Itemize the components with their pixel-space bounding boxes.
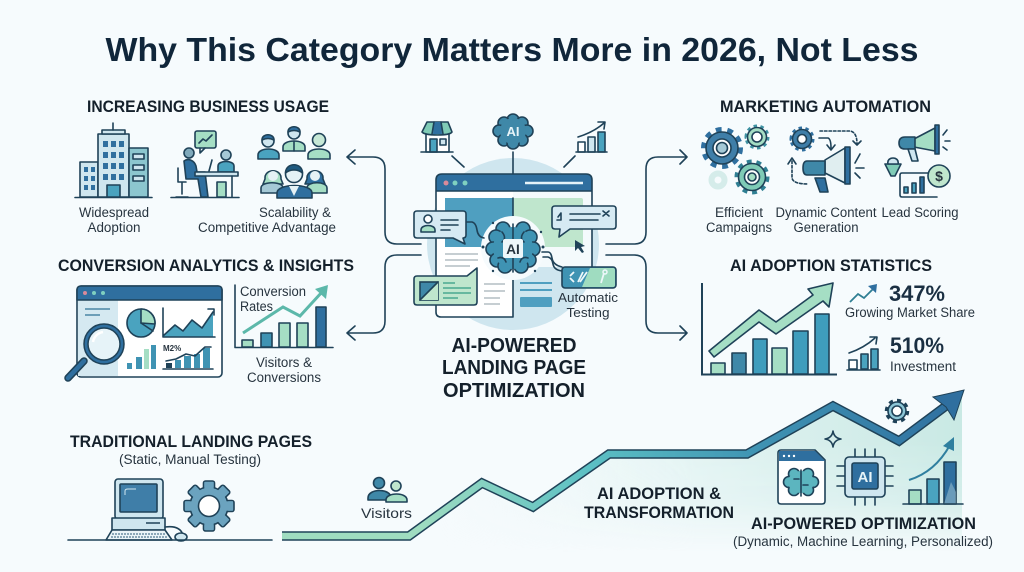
icon: gear (184, 481, 234, 531)
icon: gears (704, 126, 768, 192)
heading: INCREASING BUSINESS USAGE (87, 97, 329, 116)
icon: AI chip (837, 449, 893, 505)
icon: old computer (106, 479, 187, 541)
heading: TRADITIONAL LANDING PAGES (70, 432, 312, 451)
label: widespread: Widespread (79, 205, 149, 220)
subheading: (Static, Manual Testing) (119, 452, 261, 467)
label: generation: Generation (794, 220, 858, 235)
testing bar (543, 257, 616, 288)
center heading (442, 335, 586, 402)
label: campaigns: Campaigns (706, 220, 772, 235)
heading: AI-POWERED OPTIMIZATION (751, 514, 976, 533)
heading: AI ADOPTION STATISTICS (730, 256, 932, 275)
label: growing market share: Growing Market Share (845, 305, 975, 320)
bubble: image card (414, 268, 477, 305)
icon: small gear (886, 400, 908, 422)
label: automatic: Automatic (558, 290, 619, 305)
label: investment: Investment (890, 359, 956, 374)
icon: growth chart (576, 122, 607, 152)
area under the line (585, 398, 962, 540)
chart: conversion rates: Rates (240, 299, 273, 314)
label: adoption: Adoption (88, 220, 140, 235)
label: scalability: Scalability & (259, 205, 331, 220)
panel: marketing automation (704, 97, 958, 235)
AI brain center (467, 216, 562, 280)
bar chart with arrow (702, 283, 837, 374)
center heading: OPTIMIZATION (443, 380, 585, 402)
icon: trend up (850, 284, 877, 302)
heading: CONVERSION ANALYTICS & INSIGHTS (58, 256, 354, 275)
dashboard illustration: M2% (163, 344, 181, 353)
icon: lead scoring (885, 125, 950, 197)
dashboard illustration (68, 286, 222, 378)
stat: 347%: 347% (889, 281, 945, 306)
icon: AI brain top (493, 114, 533, 149)
bubble: message (552, 206, 616, 237)
panel: AI adoption statistics (702, 256, 975, 374)
center heading: LANDING PAGE (442, 357, 586, 379)
icon: browser with brain (778, 450, 825, 504)
label: testing: Testing (566, 305, 610, 320)
subheading: (Dynamic, Machine Learning, Personalized) (733, 534, 993, 549)
icon: small bars (847, 337, 880, 370)
icon: rising bars (903, 437, 963, 504)
icon: AI brain top: AI (506, 124, 520, 139)
label: visitors: Visitors (361, 505, 412, 521)
heading: MARKETING AUTOMATION (720, 97, 931, 116)
background circle (427, 158, 599, 330)
icon: office buildings (75, 123, 152, 198)
connector lines (452, 152, 575, 174)
label: AI adoption and transformation (584, 484, 734, 522)
AI brain center: AI (506, 242, 520, 257)
bubble: profile (414, 211, 466, 244)
title: Why This Category Matters More in 2026, Not Less (106, 31, 918, 68)
label: AI adoption and transformation: AI ADOPTION & (597, 484, 721, 503)
chart: conversion rates (235, 284, 333, 348)
panel: AI-powered optimization (733, 400, 993, 549)
icon: sparkle (825, 431, 841, 447)
icon: dynamic megaphone (788, 128, 864, 192)
panel: conversion analytics (58, 256, 354, 385)
label: conversions: Conversions (247, 370, 321, 385)
ground line (68, 539, 272, 541)
label: dynamic content: Dynamic Content (776, 205, 877, 220)
stat: 510%: 510% (890, 333, 944, 358)
icon: lead scoring: $ (935, 168, 943, 184)
panel: traditional landing pages (68, 432, 312, 541)
arrows from center to left panels (347, 150, 421, 340)
center heading: AI-POWERED (452, 335, 576, 357)
icon: visitors (368, 478, 407, 502)
arrows from center to right panels (606, 150, 687, 340)
bottom timeline: growth path (282, 390, 964, 552)
label: competitive advantage: Competitive Advantage (198, 220, 336, 235)
label: efficient: Efficient (715, 205, 763, 220)
icon: AI chip: AI (858, 469, 872, 486)
center illustration: AI-powered landing page (414, 114, 619, 330)
panel: increasing business usage (75, 97, 336, 235)
icon: team of people (258, 127, 330, 198)
label: AI adoption and transformation: TRANSFORMATION (584, 503, 734, 522)
label: lead scoring: Lead Scoring (882, 205, 958, 220)
browser window (436, 174, 592, 317)
label: visitors: Visitors & (256, 355, 312, 370)
rising arrow (282, 390, 964, 536)
icon: storefront (421, 122, 453, 152)
chart: conversion rates: Conversion (240, 284, 306, 299)
icon: meeting at desk (171, 131, 239, 198)
